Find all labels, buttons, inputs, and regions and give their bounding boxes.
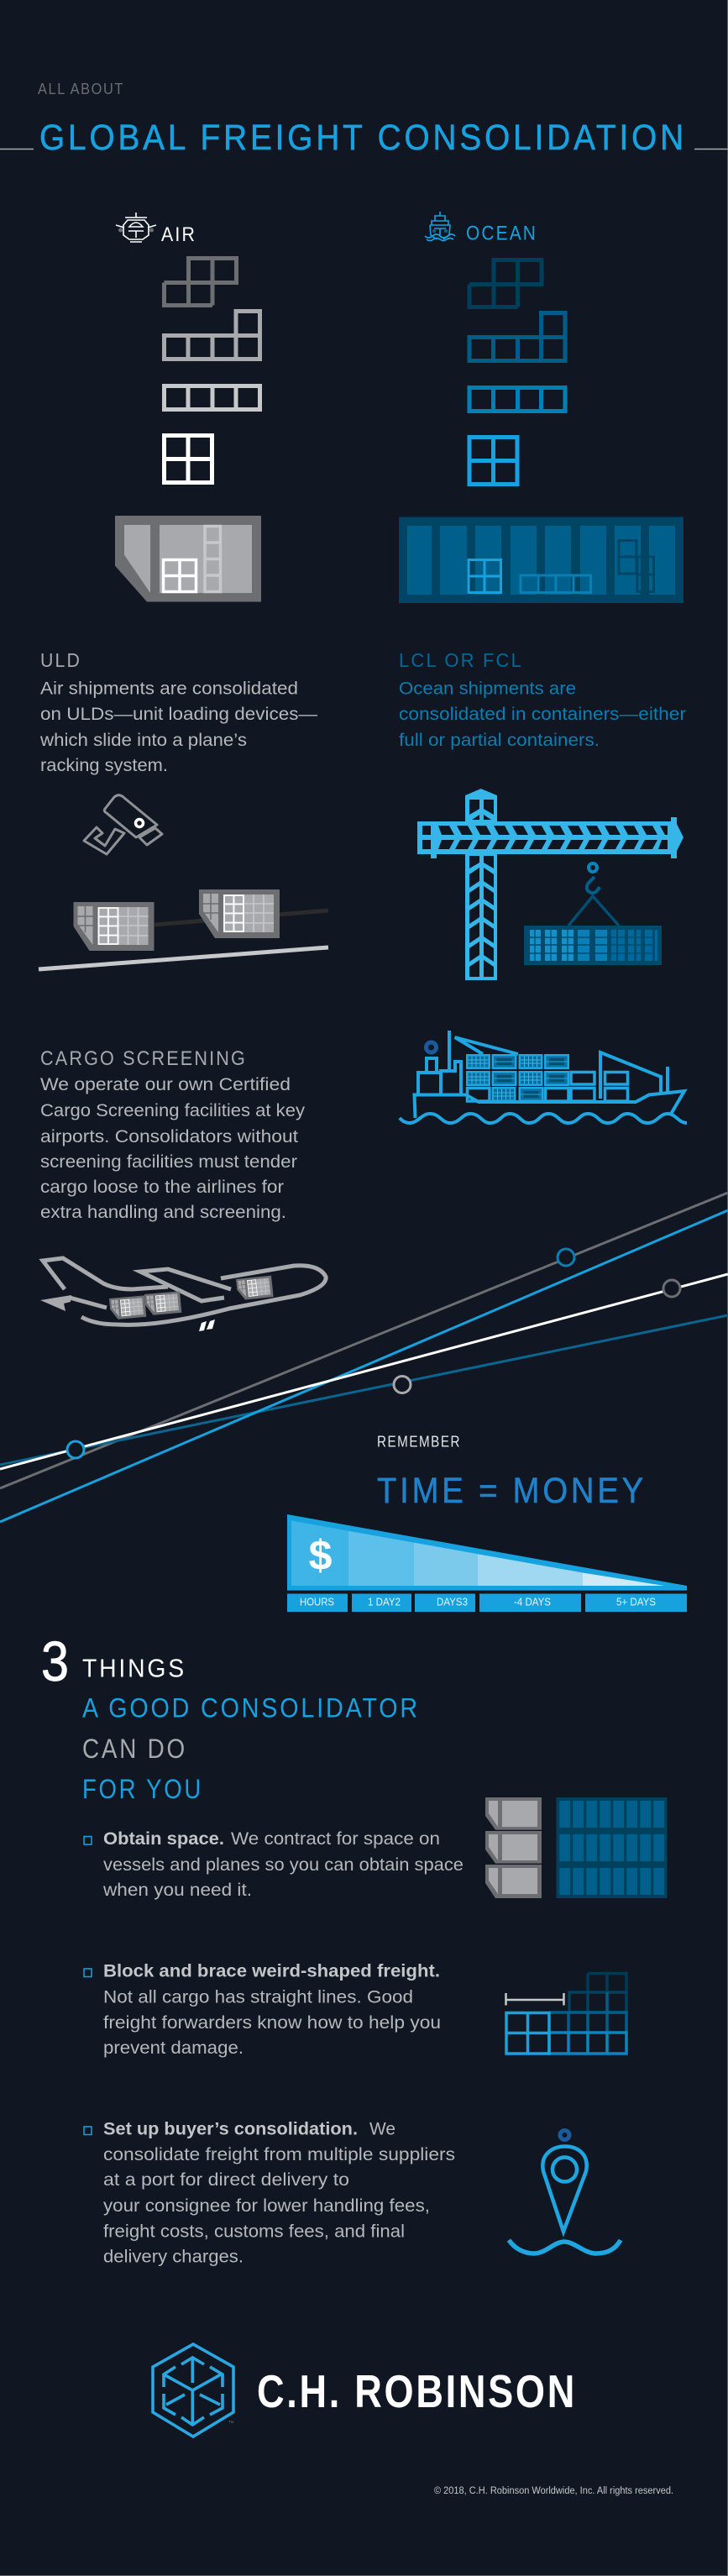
ULDs on racking [39,889,328,969]
ocean column header [425,212,537,245]
heading: 3 things a good consolidator can do for you: 3 [41,1630,69,1693]
icon: airplane with ULDs [40,1258,326,1331]
time labels: HOURS [300,1596,334,1608]
item 1: obtain space [84,1828,464,1900]
heading: ULD: ULD [40,649,81,671]
text block: cargo screening: screening facilities must tender [40,1152,297,1172]
item 3: buyer's consolidation: consolidate freight from multiple suppliers [103,2144,455,2164]
heading: 3 things a good consolidator can do for you [41,1630,420,1804]
air falling blocks [165,259,260,482]
text block: ULD: racking system. [40,755,168,775]
heading: 3 things a good consolidator can do for you: FOR YOU [82,1774,203,1804]
icon: ship front [425,212,455,240]
text block: ULD: on ULDs—unit loading devices— [40,704,318,724]
time labels: 5+ DAYS [616,1596,656,1608]
crane [417,789,683,980]
hook and sling [568,863,619,926]
text block: LCL or FCL [399,649,686,750]
text block: cargo screening: Cargo Screening facilities at key [40,1100,305,1120]
heading: 3 things a good consolidator can do for you: A GOOD CONSOLIDATOR [82,1693,420,1723]
logo mark: hexagon with arrows [153,2344,233,2437]
item 2: block and brace: Block and brace weird-shaped freight. [103,1960,440,1981]
icon: blocked and braced freight [505,1974,626,2054]
time labels: -4 DAYS [514,1596,551,1608]
item 3: buyer's consolidation: freight costs, customs fees, and final [103,2221,405,2241]
text block: LCL or FCL: Ocean shipments are [399,679,576,699]
item 3: buyer's consolidation [84,2118,455,2266]
time labels [287,1594,687,1612]
item 2: block and brace: prevent damage. [103,2038,244,2058]
bullet [84,1969,92,1977]
item 2: block and brace: freight forwarders know how to help you [103,2012,441,2033]
icon: plane front [116,212,156,242]
bullet [84,2127,92,2135]
dollar sign: $ [309,1532,333,1579]
text block: LCL or FCL: full or partial containers. [399,730,600,750]
text block: cargo screening: extra handling and screening. [40,1202,286,1222]
hanging container [524,926,662,965]
text block: cargo screening: We operate our own Certified [40,1074,291,1094]
item 3: buyer's consolidation: at a port for direct delivery to [103,2169,349,2190]
chart: value declines over time [287,1514,687,1612]
text block: ULD: Air shipments are consolidated [40,679,298,699]
text block: cargo screening [40,1047,305,1222]
heading: LCL or FCL: LCL OR FCL [399,649,523,671]
copyright: © 2018, C.H. Robinson Worldwide, Inc. All rights reserved. [434,2486,673,2496]
eyebrow: remember: REMEMBER [377,1433,461,1450]
time labels: DAYS3 [437,1596,468,1608]
icon: security camera [84,795,162,854]
item 1: obtain space: Obtain space. [103,1828,224,1849]
heading: cargo screening: CARGO SCREENING [40,1047,247,1070]
declining wedge [287,1514,687,1591]
item 1: obtain space: We contract for space on [231,1828,440,1849]
heading: 3 things a good consolidator can do for you: CAN DO [82,1734,187,1764]
text block: ULD: which slide into a plane’s [39,730,247,750]
text block: LCL or FCL: consolidated in containers—either [399,704,686,724]
route lines with nodes [0,1193,728,1522]
label: ocean: OCEAN [466,222,537,245]
logo: C.H. Robinson: TM [228,2420,234,2424]
item 3: buyer's consolidation: your consignee for lower handling fees, [103,2196,430,2216]
wordmark: C.H. ROBINSON [257,2365,577,2417]
item 1: obtain space: vessels and planes so you can obtain space [103,1855,464,1875]
bullet [84,1836,92,1844]
item 3: buyer's consolidation: We [369,2118,395,2138]
icon: tower crane with container [417,789,683,980]
label: air: AIR [161,223,196,246]
air column header [116,212,196,246]
icon: map pin over water [509,2130,621,2253]
ocean container [399,517,683,603]
heading: time equals money: TIME = MONEY [377,1471,647,1511]
ocean falling blocks [469,260,565,484]
icon: stacked ULDs and containers [485,1797,667,1898]
item 1: obtain space: when you need it. [102,1880,252,1900]
eyebrow: all about: ALL ABOUT [38,81,124,97]
item 2: block and brace [84,1960,441,2058]
text block: ULD [39,649,318,775]
heading: 3 things a good consolidator can do for you: THINGS [82,1653,186,1683]
icon: container ship [400,1031,687,1123]
item 3: buyer's consolidation: Set up buyer’s consolidation. [103,2118,358,2138]
item 3: buyer's consolidation: delivery charges. [103,2246,244,2266]
air ULD container [115,516,261,601]
text block: cargo screening: airports. Consolidators without [40,1126,298,1146]
item 2: block and brace: Not all cargo has straight lines. Good [103,1987,413,2007]
time labels: 1 DAY2 [368,1596,401,1608]
logo: C.H. Robinson [153,2344,577,2437]
text block: cargo screening: cargo loose to the airlines for [40,1177,284,1197]
